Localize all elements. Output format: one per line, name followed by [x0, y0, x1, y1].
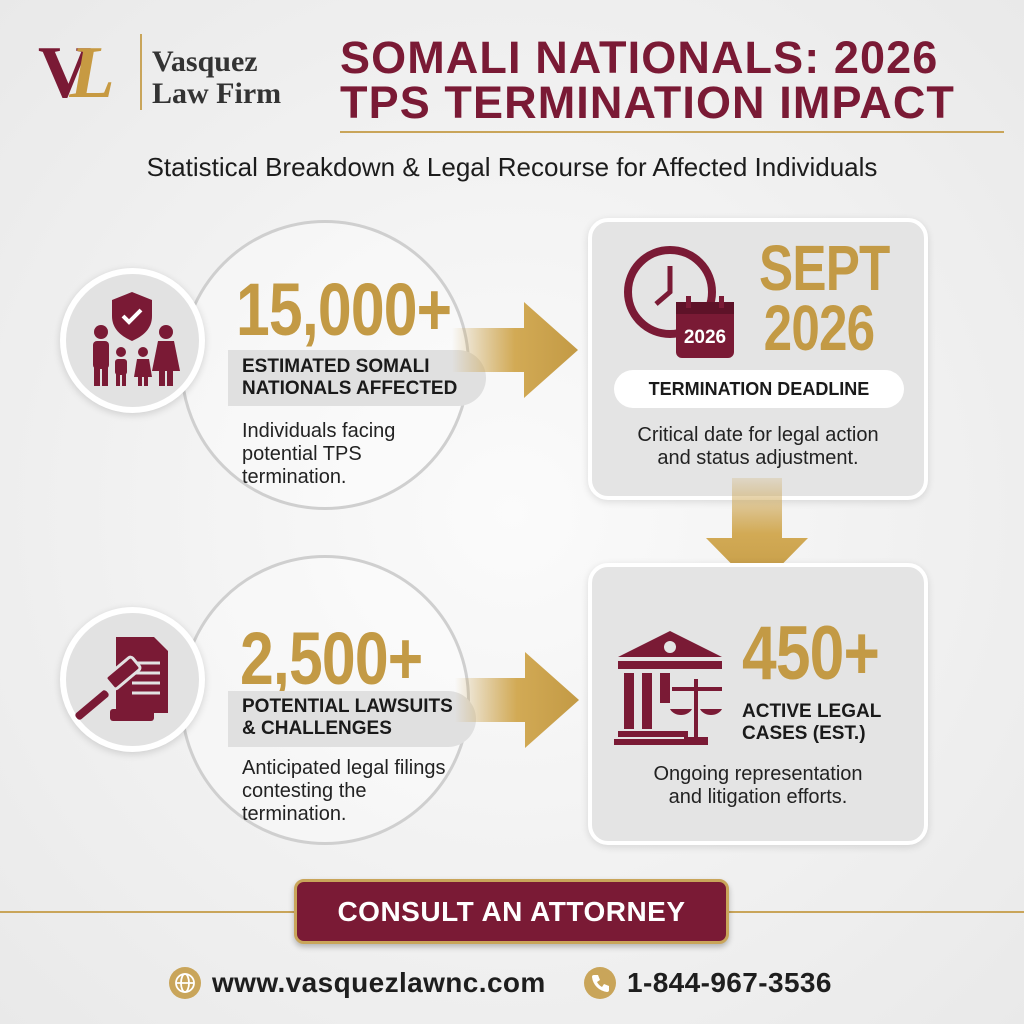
stat 15,000+: 15,000+ [236, 268, 451, 351]
description: termination. [242, 803, 346, 825]
title: SOMALI NATIONALS: 2026 [340, 32, 938, 83]
title: TPS TERMINATION IMPACT [340, 77, 955, 128]
panel: affected: ESTIMATED SOMALI [242, 356, 430, 377]
footer: phone: 1-844-967-3536 [627, 967, 832, 998]
stat 450+: 450+ [742, 611, 879, 696]
icon: clock calendar [624, 246, 734, 358]
icon: courthouse scales [614, 631, 722, 745]
description: Individuals facing [242, 420, 395, 442]
stat 2,500+: 2,500+ [240, 617, 422, 700]
description [653, 763, 863, 808]
logo [38, 32, 281, 114]
arrow: right 2 [458, 652, 579, 748]
icon: phone [584, 967, 616, 999]
label [742, 701, 881, 744]
description: potential TPS [242, 443, 362, 465]
description: contesting the [242, 780, 367, 802]
firm name: Vasquez [152, 45, 258, 78]
label pill [228, 350, 486, 406]
CTA button: CONSULT AN ATTORNEY [337, 896, 686, 927]
logo mark VL: VL [38, 32, 115, 114]
description: and litigation efforts. [669, 786, 847, 808]
title [340, 32, 955, 128]
icon: clock calendar: 2026 [684, 327, 726, 348]
firm name: Law Firm [152, 77, 281, 110]
panel: affected: NATIONALS AFFECTED [242, 378, 457, 399]
description: termination. [242, 466, 346, 488]
description [242, 757, 445, 825]
footer: website: www.vasquezlawnc.com [212, 967, 546, 998]
description: Anticipated legal filings [242, 757, 445, 779]
panel: lawsuits: POTENTIAL LAWSUITS [242, 696, 453, 717]
arrow: down [706, 478, 808, 563]
label pill [614, 370, 904, 408]
description: Critical date for legal action [637, 424, 879, 446]
label: ACTIVE LEGAL [742, 701, 881, 722]
description: Ongoing representation [653, 763, 863, 785]
stat SEPT 2026 [759, 232, 890, 364]
label: CASES (EST.) [742, 723, 866, 744]
description [242, 420, 395, 488]
label pill [228, 691, 476, 747]
firm name [152, 45, 281, 110]
description: and status adjustment. [657, 447, 859, 469]
stat SEPT 2026: SEPT [759, 232, 890, 304]
panel: deadline [588, 218, 928, 500]
label pill: TERMINATION DEADLINE [649, 379, 869, 399]
arrow: right 1 [455, 302, 578, 398]
panel: active cases [588, 563, 928, 845]
panel: affected [58, 220, 486, 510]
subtitle: Statistical Breakdown & Legal Recourse for Affected Individuals [147, 152, 877, 182]
icon: family shield [60, 268, 205, 413]
stat SEPT 2026: 2026 [764, 292, 874, 364]
description [637, 424, 879, 469]
icon: gavel document [60, 607, 205, 752]
icon: globe [169, 967, 201, 999]
panel: lawsuits: & CHALLENGES [242, 718, 392, 739]
CTA button [294, 879, 729, 944]
panel: lawsuits [58, 555, 476, 845]
